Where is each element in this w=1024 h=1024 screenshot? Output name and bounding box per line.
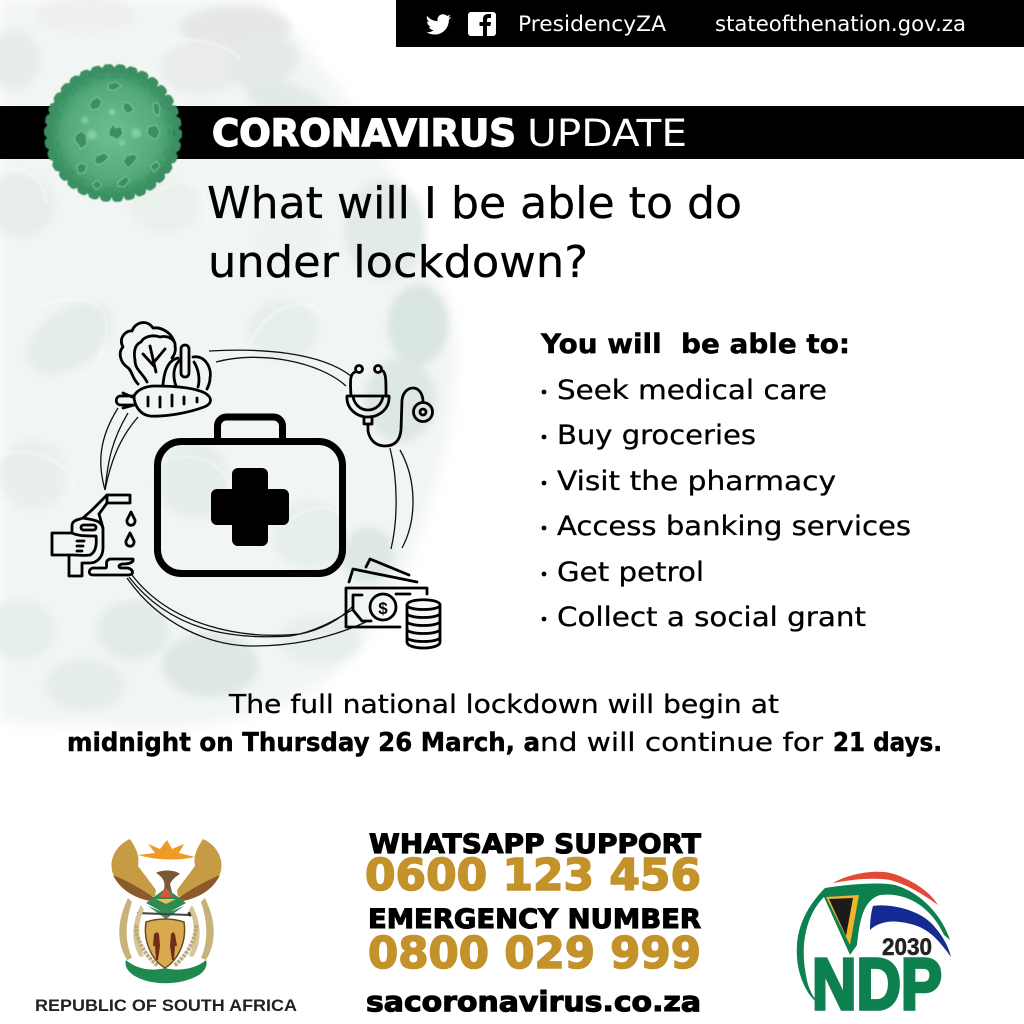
- leaves: [148, 906, 184, 919]
- emblem: coat of arms: [35, 839, 297, 1015]
- shield: [145, 919, 185, 968]
- wheat: [136, 925, 196, 966]
- contact numbers: WHATSAPP SUPPORT: [369, 829, 702, 860]
- banner subtitle: UPDATE: [527, 112, 687, 155]
- illustration: services ring: [52, 323, 440, 648]
- contact numbers: sacoronavirus.co.za: [366, 985, 701, 1018]
- protea diamond: [146, 888, 186, 914]
- heading: What will I be able to do: [207, 178, 742, 229]
- wings: [112, 839, 156, 897]
- sun: [138, 840, 195, 859]
- background: faded virus texture: [0, 0, 455, 728]
- contact numbers: 0800 029 999: [368, 928, 701, 979]
- list: permitted activities: Get petrol: [557, 557, 704, 588]
- list: permitted activities: [540, 329, 911, 633]
- NDP wordmark: NDP: [812, 945, 942, 1024]
- list: permitted activities: Access banking services: [557, 511, 911, 542]
- year: 2030: [882, 934, 932, 961]
- contact numbers: 0600 123 456: [365, 850, 701, 901]
- spear: [137, 913, 190, 915]
- icon: medical kit: [158, 417, 342, 574]
- tusks: [119, 898, 214, 960]
- lockdown notice: [67, 690, 942, 758]
- banner: [0, 106, 1024, 159]
- list: permitted activities: Buy groceries: [557, 420, 756, 451]
- lockdown notice: midnight on Thursday 26 March, a: [67, 728, 540, 758]
- list: permitted activities: Seek medical care: [557, 375, 827, 406]
- ring arcs: [101, 350, 413, 646]
- icon: twitter bird: [427, 14, 451, 34]
- black triangle with gold edge: [826, 895, 859, 945]
- heading: [207, 178, 742, 288]
- blue sweep: [870, 905, 951, 957]
- icon: facebook: [468, 12, 496, 36]
- banner title: CORONAVIRUS: [212, 112, 516, 155]
- icon: groceries: [116, 323, 211, 416]
- list: permitted activities: Visit the pharmacy: [557, 466, 836, 497]
- icon: banknotes and coins: $: [378, 599, 388, 618]
- icon: banknotes and coins: [346, 559, 440, 648]
- secretary bird: [156, 870, 180, 892]
- emblem caption: REPUBLIC OF SOUTH AFRICA: [35, 997, 297, 1015]
- lockdown notice: nd will continue for: [540, 728, 823, 758]
- lockdown notice: 21 days.: [833, 728, 942, 758]
- icon: fuel nozzle and drops: [52, 495, 135, 576]
- lockdown notice: The full national lockdown will begin at: [228, 690, 779, 720]
- website: stateofthenation.gov.za: [715, 12, 966, 36]
- logo: NDP 2030: [797, 872, 951, 1024]
- contact numbers: [365, 829, 702, 1018]
- contact numbers: EMERGENCY NUMBER: [368, 904, 701, 935]
- icon: green virus: [48, 68, 178, 198]
- top bar: social links: [396, 0, 1024, 47]
- list: permitted activities: Collect a social grant: [557, 602, 866, 633]
- list heading: You will be able to:: [540, 329, 850, 360]
- motto banner: [125, 960, 207, 983]
- icon: stethoscope: [347, 366, 432, 446]
- cross: [211, 468, 289, 546]
- green sweep: [797, 884, 950, 1005]
- red arc: [833, 872, 938, 905]
- social handle: PresidencyZA: [518, 12, 667, 36]
- heading: under lockdown?: [208, 237, 588, 288]
